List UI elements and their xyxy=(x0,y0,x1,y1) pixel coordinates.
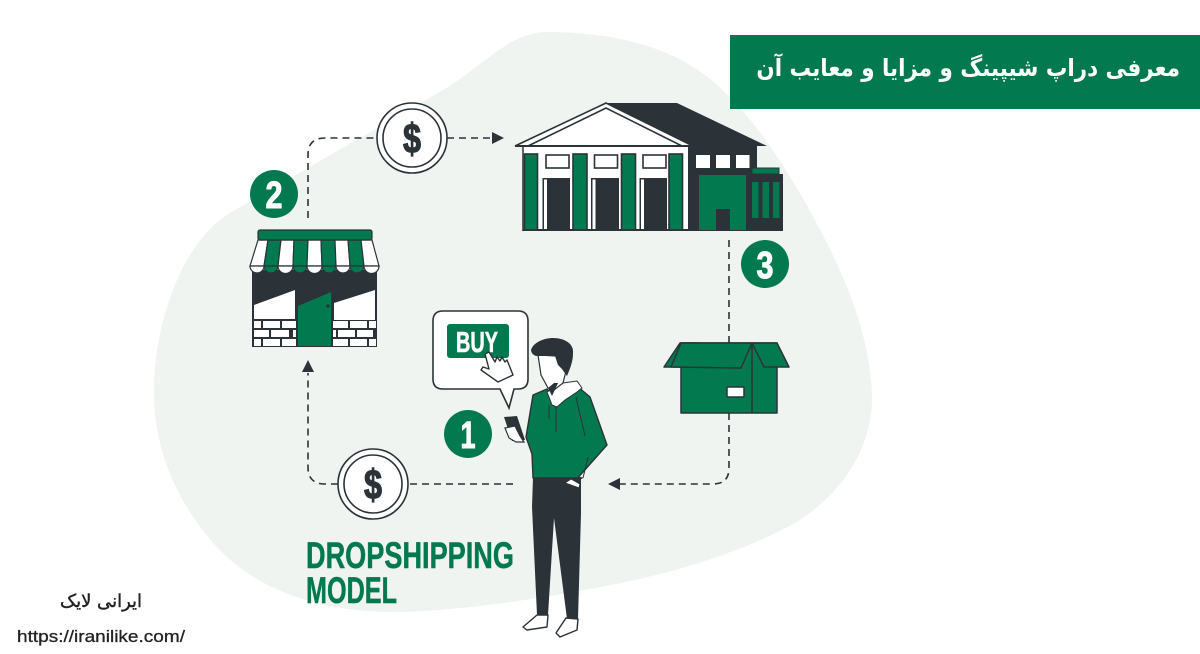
title banner xyxy=(730,35,1200,109)
speech bubble with buy button: BUY xyxy=(456,327,498,359)
icon: retail store xyxy=(250,230,379,347)
footer url: https://iranilike.com/ xyxy=(17,627,185,646)
icon: bottom dollar coin: $ xyxy=(364,461,382,508)
speech bubble with buy button xyxy=(433,311,528,408)
title banner: معرفی دراپ شیپینگ و مزایا و معایب آن xyxy=(756,53,1180,82)
background blob xyxy=(154,32,872,612)
figure: customer with phone xyxy=(504,338,607,637)
number badge 3 xyxy=(741,240,789,288)
icon: top dollar coin: $ xyxy=(403,115,421,162)
icon: top dollar coin xyxy=(377,103,447,173)
heading: dropshipping model: DROPSHIPPING xyxy=(306,535,514,576)
footer brand name: ایرانی لایک xyxy=(60,591,142,612)
heading: dropshipping model xyxy=(306,535,514,611)
icon: shipping box xyxy=(664,343,789,413)
icon: bottom dollar coin xyxy=(338,449,408,519)
number badge 1: 1 xyxy=(460,415,476,457)
heading: dropshipping model: MODEL xyxy=(306,570,397,611)
number badge 2: 2 xyxy=(266,175,282,217)
dashed flow arrows xyxy=(302,132,729,490)
number badge 3: 3 xyxy=(756,245,774,287)
number badge 2 xyxy=(250,170,298,218)
number badge 1 xyxy=(444,410,492,458)
icon: supplier warehouse xyxy=(515,103,783,231)
